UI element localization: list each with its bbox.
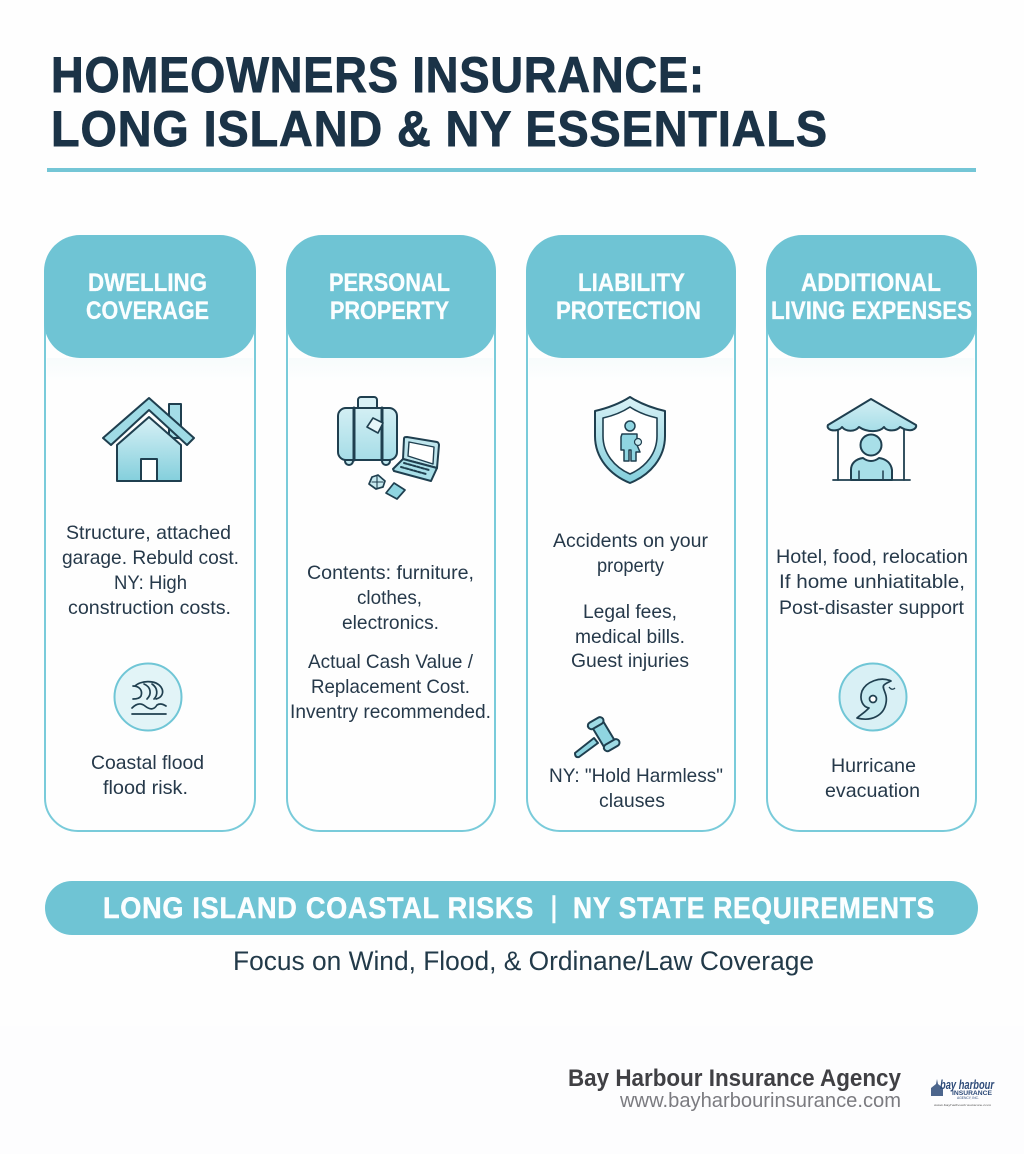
hold harmless text	[549, 765, 723, 812]
agency name and website: Bay Harbour Insurance Agency	[568, 1065, 902, 1092]
hold harmless text: NY: "Hold Harmless"	[549, 765, 723, 787]
card header: PERSONAL	[329, 269, 450, 297]
title: HOMEOWNERS INSURANCE:	[51, 47, 705, 103]
dwelling text: NY: High	[114, 572, 187, 594]
liability text: Accidents on your	[553, 530, 708, 552]
additional living text: If home unhiatitable,	[779, 571, 965, 593]
card header: PROPERTY	[330, 297, 449, 325]
liability text	[553, 530, 708, 672]
card header	[526, 235, 736, 358]
dwelling text: garage. Rebuld cost.	[62, 547, 239, 569]
card header	[286, 235, 496, 358]
logo: www.bayharbourinsurance.com	[934, 1103, 992, 1107]
panel: dwelling coverage	[44, 235, 256, 831]
panel: additional living expenses	[766, 235, 977, 831]
dwelling text: construction costs.	[68, 597, 231, 619]
icon: shield with person	[595, 397, 665, 483]
card header: DWELLING	[88, 269, 207, 297]
coastal flood text: Coastal flood	[91, 752, 204, 774]
dwelling text: Structure, attached	[66, 522, 231, 544]
card outline	[287, 250, 495, 831]
banner	[45, 881, 978, 935]
card header: PROTECTION	[556, 297, 701, 325]
liability text: property	[597, 555, 664, 577]
additional living text: Post-disaster support	[779, 597, 965, 619]
card outline	[527, 250, 735, 831]
personal property text: Contents: furniture,	[307, 562, 474, 584]
agency name and website: www.bayharbourinsurance.com	[619, 1090, 901, 1112]
title rule	[47, 168, 976, 172]
liability text: Guest injuries	[571, 650, 689, 672]
footer band	[0, 1026, 1024, 1154]
dwelling text	[62, 522, 239, 619]
personal property text: electronics.	[342, 612, 439, 634]
icon: hurricane	[840, 664, 906, 730]
card outline	[45, 250, 255, 831]
personal property text: clothes,	[357, 587, 422, 609]
agency name and website	[568, 1065, 902, 1112]
title	[51, 47, 828, 157]
card header: LIABILITY	[578, 269, 685, 297]
hurricane text: Hurricane	[831, 755, 916, 777]
liability text: Legal fees,	[583, 601, 677, 623]
panel: liability protection	[526, 235, 736, 831]
panel: personal property	[286, 235, 496, 831]
personal property text: Actual Cash Value /	[308, 651, 474, 673]
icon: gavel	[575, 716, 621, 757]
card header	[44, 235, 256, 358]
card header: LIVING EXPENSES	[771, 297, 972, 325]
icon: suitcase, laptop and valuables	[338, 397, 439, 499]
banner: |	[550, 891, 559, 924]
card header	[766, 235, 977, 358]
personal property text: Inventry recommended.	[290, 701, 491, 723]
personal property text: Replacement Cost.	[311, 676, 470, 698]
logo: bay harbour	[940, 1078, 995, 1092]
logo: INSURANCE	[952, 1091, 992, 1097]
icon: shelter with person	[828, 399, 916, 480]
hurricane text: evacuation	[825, 780, 920, 802]
icon: flood wave	[114, 664, 182, 730]
additional living text: Hotel, food, relocation	[776, 546, 968, 568]
additional living text	[776, 546, 968, 619]
logo: AGENCY, INC.	[957, 1096, 979, 1100]
card outline	[767, 250, 976, 831]
card header: COVERAGE	[86, 297, 209, 325]
banner: NY STATE REQUIREMENTS	[573, 892, 935, 925]
card header: ADDITIONAL	[801, 269, 941, 297]
coastal flood text	[91, 752, 204, 799]
banner: LONG ISLAND COASTAL RISKS	[103, 892, 534, 925]
coastal flood text: flood risk.	[103, 777, 188, 799]
title: LONG ISLAND & NY ESSENTIALS	[51, 101, 828, 157]
personal property text	[290, 562, 491, 723]
hold harmless text: clauses	[599, 790, 665, 812]
hurricane text	[825, 755, 920, 802]
liability text: medical bills.	[575, 626, 685, 648]
banner subtitle: Focus on Wind, Flood, & Ordinane/Law Coverage	[233, 946, 814, 976]
icon: house	[103, 398, 194, 481]
logo	[931, 1078, 995, 1107]
